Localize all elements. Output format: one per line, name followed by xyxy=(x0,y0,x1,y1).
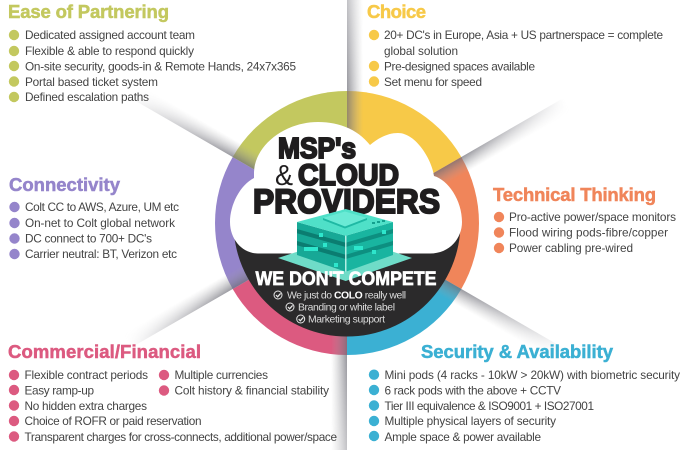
centre title xyxy=(253,133,440,221)
panel: Connectivity xyxy=(9,174,179,261)
We don't compete block: Marketing support xyxy=(308,314,385,326)
bullets xyxy=(369,370,379,441)
We don't compete block: We just do COLO really well xyxy=(287,290,406,302)
list: Multiple physical layers of security xyxy=(384,414,556,428)
list: Colt history & financial stability xyxy=(174,384,329,398)
panel: Choice xyxy=(367,1,663,89)
list: global solution xyxy=(384,44,458,58)
list: Colt CC to AWS, Azure, UM etc xyxy=(25,200,179,214)
list: Flexible & able to respond quickly xyxy=(25,44,194,58)
list xyxy=(25,200,179,261)
list: On-site security, goods-in & Remote Hands, 24x7x365 xyxy=(25,60,296,74)
list xyxy=(24,368,337,444)
bullets xyxy=(9,30,19,102)
We don't compete block xyxy=(256,269,436,326)
list: Easy ramp-up xyxy=(24,384,94,398)
list xyxy=(25,28,296,104)
list: Tier III equivalence & ISO9001 + ISO27001 xyxy=(384,399,594,413)
heading: Security & Availability xyxy=(421,341,614,362)
panel: Security & Availability xyxy=(369,341,680,444)
list: Transparent charges for cross-connects, additional power/space xyxy=(24,430,337,444)
list: Set menu for speed xyxy=(384,75,482,89)
panel: Commercial/Financial xyxy=(8,341,337,444)
cloud xyxy=(230,122,462,254)
panel: Technical Thinking xyxy=(493,184,676,255)
dark lower semicircle xyxy=(234,232,460,336)
list: Pre-designed spaces available xyxy=(384,60,535,74)
centre title: PROVIDERS xyxy=(253,183,440,221)
list: Mini pods (4 racks - 10kW > 20kW) with biometric security xyxy=(384,368,680,382)
list: Choice of ROFR or paid reservation xyxy=(24,414,202,428)
list: 6 rack pods with the above + CCTV xyxy=(384,384,561,398)
list: Power cabling pre-wired xyxy=(509,241,633,255)
list: On-net to Colt global network xyxy=(25,216,175,230)
list: 20+ DC's in Europe, Asia + US partnerspace = complete xyxy=(384,28,663,42)
heading: Technical Thinking xyxy=(493,184,656,205)
icon: check 1 xyxy=(274,291,282,299)
bullets xyxy=(9,370,169,442)
panel: Ease of Partnering xyxy=(8,1,296,104)
list xyxy=(384,28,663,89)
centre title: CLOUD xyxy=(298,159,399,192)
list: Multiple currencies xyxy=(174,368,268,382)
We don't compete block: WE DON'T COMPETE xyxy=(256,269,436,290)
list: Ample space & power available xyxy=(384,430,541,444)
list: No hidden extra charges xyxy=(24,399,147,413)
icon: check 3 xyxy=(297,315,305,323)
list: Portal based ticket system xyxy=(25,75,158,89)
list: Flexible contract periods xyxy=(24,368,148,382)
icon: data centre building xyxy=(278,209,412,281)
ring: six coloured segments xyxy=(215,91,479,355)
bullets xyxy=(9,202,20,259)
list: Carrier neutral: BT, Verizon etc xyxy=(25,247,177,261)
centre title: & xyxy=(275,160,293,192)
heading: Connectivity xyxy=(9,174,121,195)
We don't compete block: Branding or white label xyxy=(298,302,395,314)
heading: Commercial/Financial xyxy=(8,341,201,362)
bullets xyxy=(369,30,379,87)
bullets xyxy=(494,212,504,253)
list xyxy=(384,368,680,444)
centre title: MSP's xyxy=(278,133,356,165)
heading: Ease of Partnering xyxy=(8,1,169,22)
icon: check 2 xyxy=(286,303,294,311)
list: Dedicated assigned account team xyxy=(25,28,195,42)
list: Defined escalation paths xyxy=(25,90,149,104)
list: Flood wiring pods-fibre/copper xyxy=(509,226,668,240)
list xyxy=(509,210,676,255)
list: Pro-active power/space monitors xyxy=(509,210,676,224)
list: DC connect to 700+ DC's xyxy=(25,232,152,246)
heading: Choice xyxy=(367,1,426,22)
spoke shadows xyxy=(122,0,572,450)
